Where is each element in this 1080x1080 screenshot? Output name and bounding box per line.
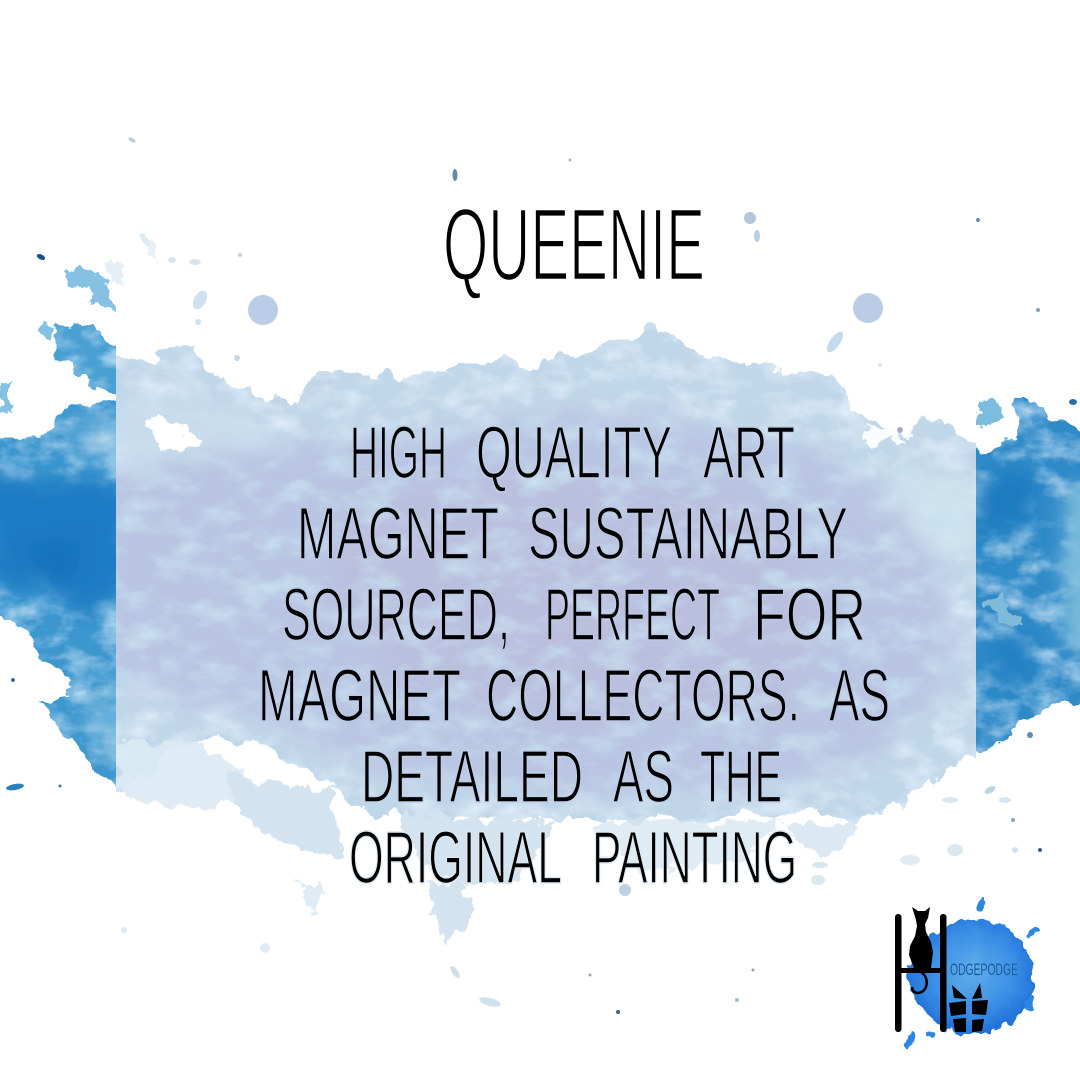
icon: gift box xyxy=(949,983,988,1032)
panel: lavender centre xyxy=(100,395,980,795)
description text block: MAGNET xyxy=(258,654,461,737)
description text block: HIGH xyxy=(350,411,447,494)
description text block: DETAILED xyxy=(361,735,583,818)
description text block: COLLECTORS. xyxy=(486,654,800,737)
description text block: QUALITY xyxy=(476,411,672,494)
panel: pale central splash xyxy=(100,328,990,822)
icon: cat xyxy=(909,907,933,968)
description text block: MAGNET xyxy=(297,492,499,575)
panel: lower-left pale wash xyxy=(116,740,260,810)
description text block: ART xyxy=(703,411,795,494)
description text block: FOR xyxy=(753,573,866,656)
description text block: SUSTAINABLY xyxy=(528,492,848,575)
left splatter xyxy=(6,784,24,790)
logo blue splash xyxy=(902,898,1038,1049)
description text block: ORIGINAL xyxy=(349,816,562,899)
logo letter H xyxy=(895,914,946,1032)
pale splash fragments around the panel xyxy=(105,232,860,945)
description text block xyxy=(258,411,890,899)
description text block: AS xyxy=(829,654,890,737)
logo: Hodgepodge xyxy=(895,898,1038,1049)
panel: white holes xyxy=(150,418,905,452)
paint splash: right saturated wash xyxy=(976,396,1080,754)
description text block: PERFECT xyxy=(545,573,720,656)
icon: cat tail xyxy=(912,972,927,993)
logo wordmark: ODGEPODGE xyxy=(950,960,1018,979)
description text block: THE xyxy=(700,735,782,818)
description text block: PAINTING xyxy=(592,816,797,899)
right light fragment xyxy=(980,400,1005,432)
description text block: SOURCED, xyxy=(282,573,510,656)
paint splash: left saturated wash xyxy=(0,264,116,790)
title: QUEENIE xyxy=(443,187,705,302)
description text block: AS xyxy=(613,735,674,818)
